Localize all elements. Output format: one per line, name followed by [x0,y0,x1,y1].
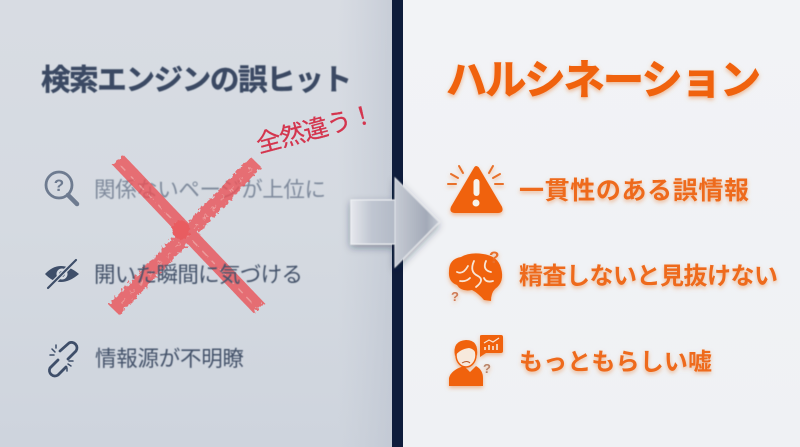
heading: search engine mishit: 検索エンジンの誤ヒット [41,64,352,97]
text: consistent misinformation: 一貫性のある誤情報 [519,177,749,205]
heading: hallucination: ハルシネーション [446,57,761,103]
divider [392,0,403,447]
text: noticed on opening: 開いた瞬間に気づける [94,263,303,287]
item: consistent misinformation [448,166,749,212]
icon: magnifier with question mark [46,172,77,204]
text: unclear source: 情報源が不明瞭 [95,347,244,371]
icon: person with chart bubble: ? [483,361,491,376]
item: unclear source [49,342,244,376]
item: noticed on opening [45,260,79,288]
text: undetectable without scrutiny: 精査しないと見抜けない [519,263,778,290]
item: plausible lie [449,335,712,386]
panel: search engine mishit [0,0,393,447]
icon: broken chain link [49,342,77,376]
icon: warning triangle with rays [448,166,503,212]
item: undetectable without scrutiny [449,248,778,304]
icon: brain with question marks: ? [489,248,499,267]
arrow [351,178,439,267]
panel: hallucination [403,0,800,447]
icon: person with chart bubble [449,335,503,386]
item: irrelevant pages rank high [46,172,326,204]
icon: crossed-out eye [45,260,79,288]
text: plausible lie: もっともらしい嘘 [519,349,712,376]
handwritten note: 全然違う！ [253,100,378,159]
text: irrelevant pages: 関係ないページが上位に [94,178,326,202]
icon: brain with question marks: ? [451,289,459,304]
icon: brain with question marks [449,248,502,304]
red crayon X mark [114,160,259,310]
icon: magnifier with question mark: ? [54,176,64,195]
